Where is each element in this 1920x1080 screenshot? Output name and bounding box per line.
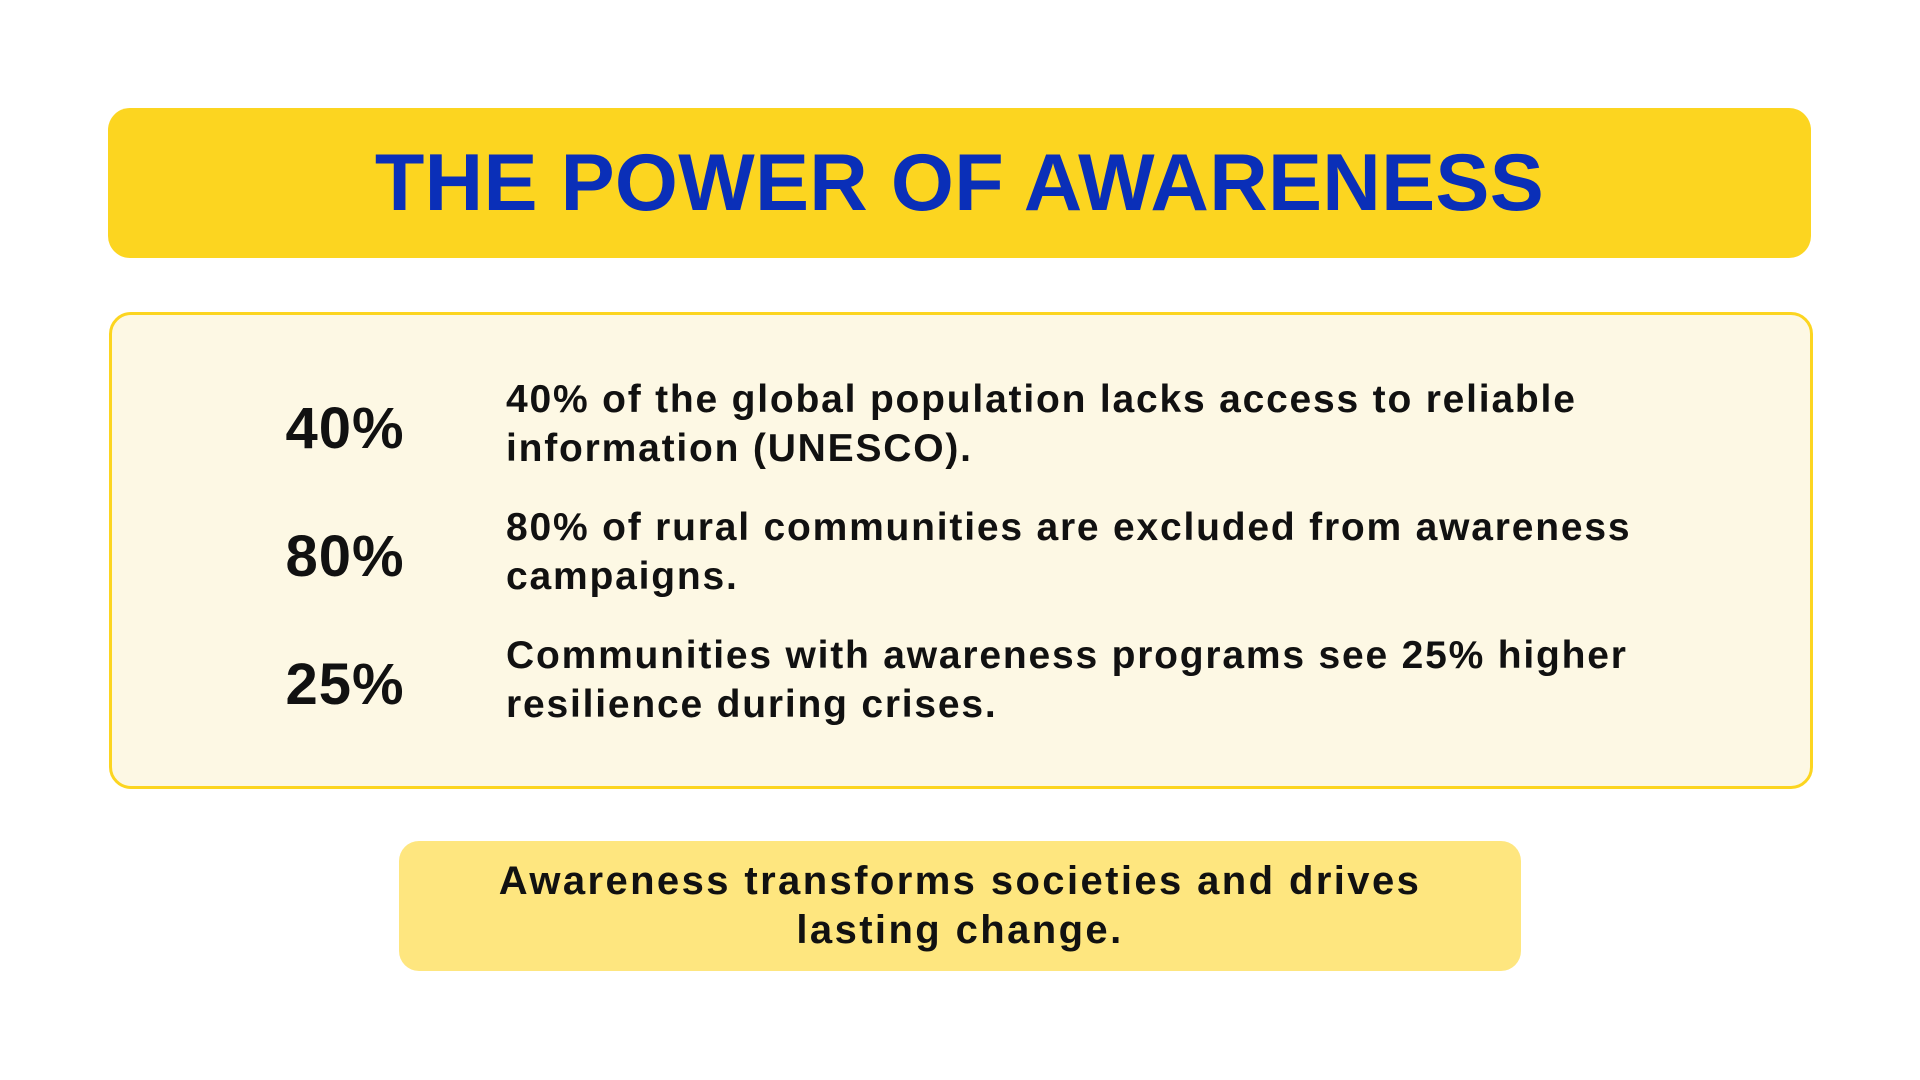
callout: conclusion: Awareness transforms societies and drives bbox=[499, 859, 1421, 903]
title: THE POWER OF AWARENESS bbox=[375, 138, 1544, 228]
title bbox=[108, 108, 1811, 258]
stat row 40%: 40% of the global population lacks access to reliable bbox=[506, 378, 1577, 421]
stat row 25% bbox=[285, 634, 1628, 726]
stat row 25%: Communities with awareness programs see 25% higher bbox=[506, 634, 1628, 677]
stat row 40%: 40% bbox=[285, 396, 405, 461]
stat row 80%: 80% bbox=[285, 524, 405, 589]
callout: conclusion: lasting change. bbox=[796, 908, 1124, 952]
stat row 80%: campaigns. bbox=[506, 555, 739, 598]
stat row 80%: 80% of rural communities are excluded from awareness bbox=[506, 506, 1631, 549]
callout: conclusion bbox=[399, 841, 1521, 971]
stat row 40% bbox=[285, 378, 1577, 470]
stat row 25%: resilience during crises. bbox=[506, 683, 998, 726]
panel: statistics bbox=[109, 312, 1813, 789]
stat row 80% bbox=[285, 506, 1631, 598]
stat row 40%: information (UNESCO). bbox=[506, 427, 973, 470]
stat row 25%: 25% bbox=[285, 652, 405, 717]
